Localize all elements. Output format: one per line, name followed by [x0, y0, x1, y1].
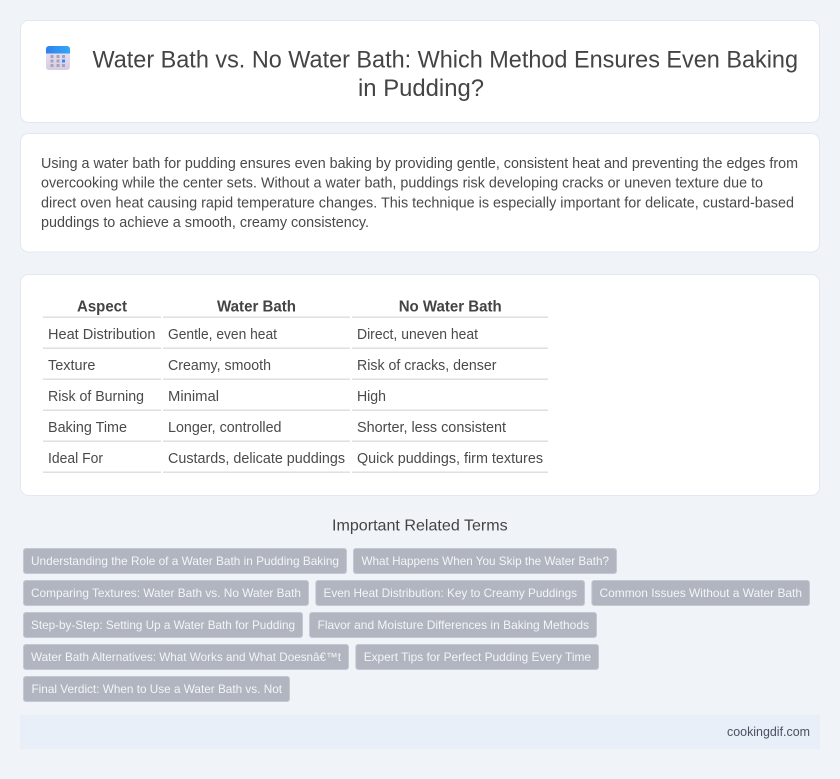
row: ideal for: Custards, delicate puddings [168, 451, 345, 467]
panel: related term tags [24, 548, 810, 702]
row: heat distribution: Direct, uneven heat [357, 327, 478, 343]
row: texture: Creamy, smooth [168, 358, 271, 374]
tag [24, 644, 348, 670]
tag [356, 644, 598, 670]
row: ideal for: Quick puddings, firm textures [357, 451, 543, 467]
tag [24, 676, 290, 702]
text block: summary paragraph: direct oven heat causing rapid temperature changes. This technique is especially important for delicate, custard-based [41, 196, 794, 212]
tag: Flavor and Moisture Differences in Baking Methods [318, 618, 589, 632]
tag: Step-by-Step: Setting Up a Water Bath for Pudding [31, 618, 295, 632]
tag: Water Bath Alternatives: What Works and What Doesnâ€™t [31, 650, 342, 664]
tag [24, 612, 302, 638]
row: ideal for [48, 451, 543, 467]
tag: What Happens When You Skip the Water Bath? [362, 554, 609, 568]
tag: Final Verdict: When to Use a Water Bath vs. Not [32, 682, 283, 696]
heading: important related terms: Important Related Terms [332, 518, 508, 535]
tag: Understanding the Role of a Water Bath in Pudding Baking [31, 554, 339, 568]
text block: summary paragraph [41, 156, 798, 231]
row: heat distribution [48, 327, 478, 343]
row: texture [48, 358, 497, 374]
row: risk of burning: Minimal [168, 389, 219, 405]
tag [354, 548, 616, 574]
text block: summary paragraph: puddings to achieve a smooth, creamy consistency. [41, 215, 369, 231]
tag [592, 580, 810, 606]
row: baking time: Longer, controlled [168, 420, 282, 436]
row: risk of burning [48, 389, 386, 405]
row: heat distribution: Heat Distribution [48, 327, 156, 343]
table header row: Aspect [77, 299, 128, 316]
tag [24, 548, 346, 574]
title: Water Bath vs. No Water Bath: Which Method Ensures Even Baking [92, 46, 798, 74]
row: ideal for: Ideal For [48, 451, 103, 467]
tag: Comparing Textures: Water Bath vs. No Water Bath [31, 586, 301, 600]
tag [24, 580, 308, 606]
row: risk of burning: High [357, 389, 386, 405]
comparison table [43, 299, 548, 473]
text block: summary paragraph: overcooking while the center sets. Without a water bath, puddings risk developing cracks or uneven texture due to [41, 176, 763, 192]
title [92, 46, 798, 102]
table header row: No Water Bath [399, 299, 502, 316]
row: texture: Texture [48, 358, 96, 374]
row: texture: Risk of cracks, denser [357, 358, 497, 374]
table header row [77, 299, 502, 316]
row: heat distribution: Gentle, even heat [168, 327, 277, 343]
row: baking time [48, 420, 506, 436]
title: in Pudding? [358, 75, 484, 102]
text block: summary paragraph: Using a water bath for pudding ensures even baking by providing gentle, consistent heat and preventing the edges from [41, 156, 798, 172]
tag: Even Heat Distribution: Key to Creamy Puddings [324, 586, 577, 600]
row: baking time: Baking Time [48, 420, 127, 436]
panel: summary card [20, 134, 820, 252]
tag [316, 580, 584, 606]
tag: Common Issues Without a Water Bath [600, 586, 802, 600]
footer site name: cookingdif.com [727, 725, 810, 739]
panel: comparison table card [20, 274, 820, 496]
icon: calendar [46, 46, 70, 70]
row: baking time: Shorter, less consistent [357, 420, 506, 436]
footer [20, 715, 820, 749]
tag: Expert Tips for Perfect Pudding Every Time [364, 650, 591, 664]
panel: title card [20, 20, 820, 122]
row: risk of burning: Risk of Burning [48, 389, 144, 405]
table header row: Water Bath [217, 299, 296, 316]
tag [310, 612, 596, 638]
